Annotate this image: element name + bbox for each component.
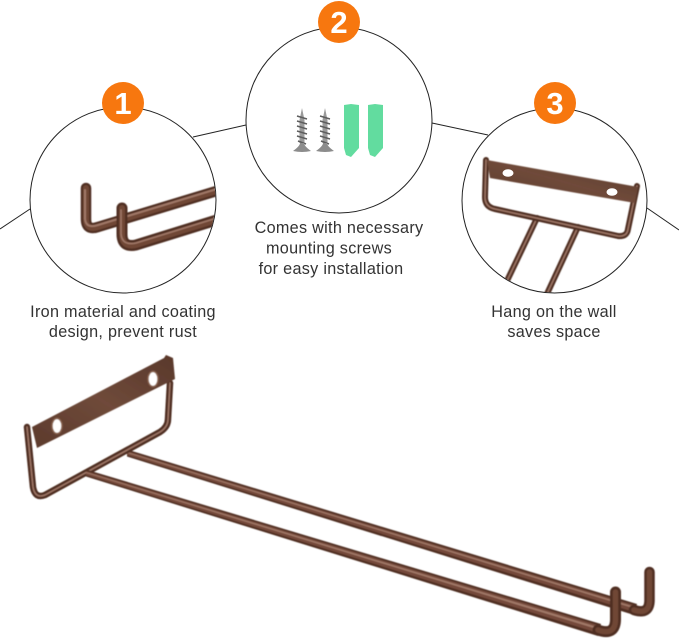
caption: iron material: design, prevent rust <box>49 323 197 341</box>
caption: hang on wall: Hang on the wall <box>491 303 617 321</box>
badge 1 <box>102 82 144 124</box>
bracket wire <box>27 383 170 496</box>
caption: mounting screws: for easy installation <box>259 260 403 278</box>
circle outline 2 <box>246 27 432 213</box>
caption: iron material: Iron material and coating <box>30 303 216 321</box>
caption: hang on wall: saves space <box>507 323 601 341</box>
connector lines between circles <box>0 123 679 230</box>
circle outline 3 <box>462 108 647 293</box>
badge 1: 1 <box>114 86 132 121</box>
icon: screw <box>316 108 334 152</box>
badge 3: 3 <box>546 86 564 121</box>
caption: mounting screws: mounting screws <box>266 240 392 258</box>
icon: green wall plug <box>368 104 383 157</box>
icon: rack hook close-up <box>85 188 220 246</box>
icon: rack bracket close-up <box>485 160 638 296</box>
panel: mounting screws <box>246 1 432 213</box>
badge 2: 2 <box>330 5 348 40</box>
badge 2 <box>318 1 360 43</box>
panel: wall mount detail <box>462 82 647 296</box>
icon: screw <box>293 108 311 152</box>
main product image: wine glass rack <box>27 355 650 636</box>
front rod with hook <box>86 470 616 636</box>
badge 3 <box>534 82 576 124</box>
panel: iron material detail <box>30 82 220 293</box>
caption: mounting screws: Comes with necessary <box>255 219 424 237</box>
mounting plate with holes <box>32 355 175 448</box>
icon: green wall plug <box>344 104 359 157</box>
rear rod with hook <box>127 450 650 615</box>
circle outline 1 <box>30 107 216 293</box>
